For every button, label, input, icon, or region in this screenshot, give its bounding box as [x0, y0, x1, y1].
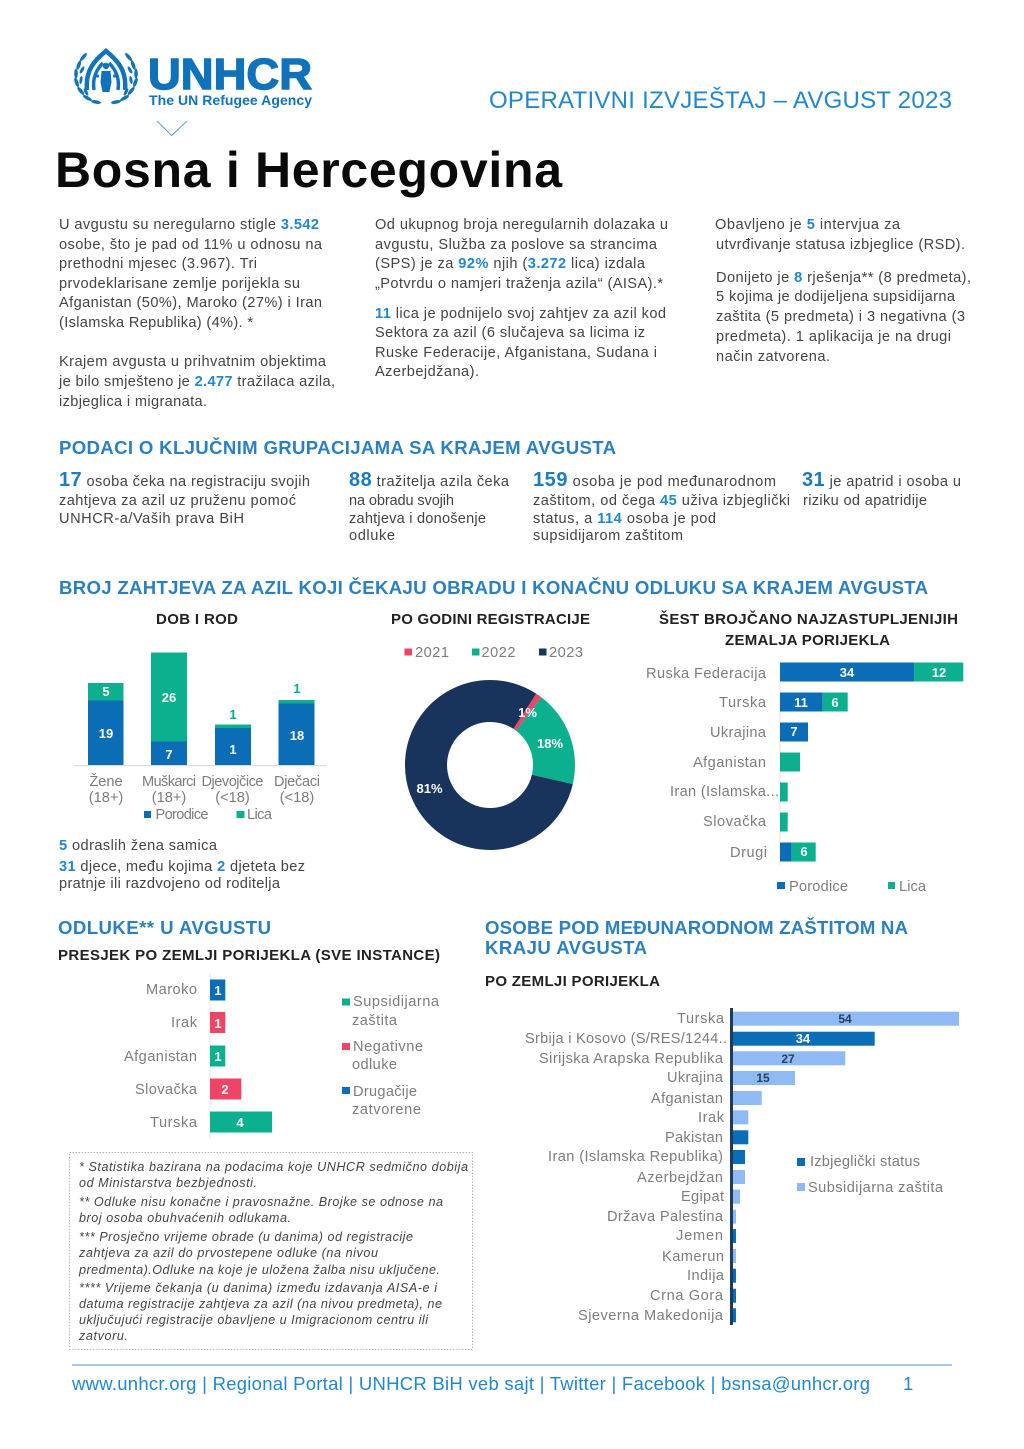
- text block: SPS and asylum applications: „Potvrdu o namjeri traženja azila“ (AISA).*: [375, 276, 663, 292]
- horizontal bar chart: Kamerun: [662, 1249, 724, 1265]
- key figure: 159 under international protection: status, a 114 osoba je pod: [533, 511, 716, 527]
- chart legend: Porodice: [789, 879, 848, 895]
- heading: pending applications: BROJ ZAHTJEVA ZA AZIL KOJI ČEKAJU OBRADU I KONAČNU ODLUKU SA KRAJEM AVGUSTA: [59, 577, 928, 598]
- footnote text: *** Prosječno vrijeme obrade (u danima) od registracije: [79, 1230, 413, 1244]
- stacked bar chart: (<18): [280, 790, 314, 806]
- horizontal bar chart: Indija: [687, 1268, 725, 1284]
- key figure: 159 under international protection: zaštitom, od čega 45 uživa izbjeglički: [533, 493, 790, 509]
- text block: RSD interviews and decisions: zaštita (5 predmeta) i 3 negativna (3: [716, 309, 965, 325]
- footnote text: ** Odluke nisu konačne i pravosnažne. Brojke se odnose na: [79, 1195, 443, 1209]
- key figure: 88 applicants: [349, 469, 510, 544]
- key figure: 17 persons: zahtjeva za azil uz pruženu pomoć: [59, 493, 296, 509]
- text block: RSD interviews and decisions: [715, 217, 971, 365]
- text block: SPS and asylum applications: avgustu, Služba za poslove sa strancima: [375, 237, 658, 253]
- stacked bar chart: [74, 652, 327, 806]
- panel: top countries of origin chart: [646, 610, 963, 895]
- horizontal bar chart: Afganistan: [651, 1091, 723, 1107]
- chart legend: 2021: [415, 645, 449, 661]
- key figure: 17 persons: 17 osoba čeka na registraciju svojih: [59, 469, 310, 491]
- chart legend: Negativne: [353, 1039, 423, 1055]
- horizontal bar chart: Crna Gora: [650, 1288, 724, 1304]
- sub heading: PRESJEK PO ZEMLJI PORIJEKLA (SVE INSTANCE): [58, 947, 440, 964]
- logo wordmark: UNHCR: [148, 50, 312, 99]
- horizontal bar chart: 15: [756, 1071, 770, 1085]
- stacked bar chart: Muškarci: [142, 774, 196, 790]
- horizontal bar chart: 27: [781, 1052, 795, 1066]
- key figure: 17 persons: UNHCR-a/Vaših prava BiH: [59, 511, 244, 527]
- footnote text: uključujući registracije obavljene u Imigracionom centru ili: [79, 1313, 429, 1327]
- title: Bosna i Hercegovina: [55, 142, 563, 198]
- horizontal bar chart: [525, 1008, 959, 1325]
- text block: RSD interviews and decisions: utvrđivanje statusa izbjeglice (RSD).: [716, 237, 965, 253]
- horizontal stacked bar chart: Drugi: [730, 845, 767, 861]
- horizontal stacked bar chart: 6: [800, 844, 808, 859]
- text block: SPS and asylum applications: [375, 217, 668, 380]
- report label: OPERATIVNI IZVJEŠTAJ – AVGUST 2023: [489, 86, 952, 114]
- horizontal stacked bar chart: Afganistan: [693, 755, 766, 771]
- text block: arrivals summary: prethodni mjesec (3.967). Tri: [59, 256, 257, 272]
- panel: registration year chart: [391, 611, 590, 850]
- horizontal stacked bar chart: 7: [790, 724, 798, 739]
- horizontal stacked bar chart: Ruska Federacija: [646, 666, 767, 682]
- panel: persons under international protection: [485, 917, 959, 1325]
- text block: arrivals summary: prvodeklarisane zemlje porijekla su: [59, 276, 300, 292]
- horizontal bar chart: 1: [214, 983, 222, 998]
- footnote text: * Statistika bazirana na podacima koje UNHCR sedmično dobija: [79, 1160, 468, 1174]
- chart heading: PO GODINI REGISTRACIJE: [391, 611, 590, 628]
- stacked bar chart: (18+): [152, 790, 186, 806]
- stacked bar chart: (<18): [215, 790, 250, 806]
- horizontal bar chart: 34: [796, 1031, 811, 1046]
- horizontal bar chart: Iran (Islamska Republika): [548, 1149, 723, 1165]
- stacked bar chart: 19: [99, 726, 113, 741]
- chart legend: Drugačije: [353, 1084, 417, 1100]
- text block: arrivals summary: U avgustu su neregularno stigle 3.542: [59, 217, 319, 233]
- key figure: 159 under international protection: supsidijarom zaštitom: [533, 528, 683, 544]
- text block: arrivals summary: Krajem avgusta u prihvatnim objektima: [59, 354, 327, 370]
- horizontal stacked bar chart: 34: [840, 665, 855, 680]
- footnote text: datuma registracije zahtjeva za azil (na nivou predmeta), ne: [79, 1297, 442, 1311]
- horizontal stacked bar chart: 11: [794, 695, 808, 710]
- section heading: [485, 917, 908, 958]
- horizontal bar chart: Država Palestina: [607, 1209, 724, 1225]
- text block: arrivals summary: [58, 217, 335, 410]
- donut chart: 81%: [416, 781, 443, 796]
- chart legend: Porodice: [156, 807, 208, 823]
- horizontal bar chart: 2: [221, 1082, 229, 1097]
- note: women and children: 31 djece, među kojima 2 djeteta bez: [59, 859, 305, 875]
- chart legend: 2022: [482, 645, 516, 661]
- footnote text: od Ministarstva bezbjednosti.: [79, 1176, 257, 1190]
- text block: RSD interviews and decisions: Obavljeno je 5 intervjua za: [715, 217, 901, 233]
- chart heading: DOB I ROD: [156, 611, 238, 628]
- note: women and children: 5 odraslih žena samica: [59, 838, 218, 854]
- text block: arrivals summary: Afganistan (50%), Maroko (27%) i Iran: [59, 295, 322, 311]
- text block: SPS and asylum applications: Od ukupnog broja neregularnih dolazaka u: [375, 217, 668, 233]
- section heading: KRAJU AVGUSTA: [485, 937, 647, 958]
- horizontal stacked bar chart: Iran (Islamska...: [670, 784, 779, 800]
- chart legend: odluke: [352, 1057, 397, 1073]
- footer: [71, 1364, 952, 1394]
- horizontal bar chart: Irak: [698, 1110, 725, 1126]
- horizontal bar chart: Turska: [150, 1115, 198, 1131]
- footnote text: [78, 1160, 468, 1343]
- icon: chevron: [157, 121, 187, 136]
- key figure: 159 under international protection: [533, 469, 790, 544]
- text block: RSD interviews and decisions: način zatvorena.: [716, 349, 830, 365]
- chart legend: 2023: [549, 645, 583, 661]
- text block: RSD interviews and decisions: 5 kojima je dodijeljena supsidijarna: [716, 289, 956, 305]
- logo tagline: The UN Refugee Agency: [149, 92, 312, 108]
- panel: footnotes: [70, 1152, 472, 1350]
- chart heading: ZEMALJA PORIJEKLA: [725, 632, 890, 649]
- stacked bar chart: 1: [229, 742, 237, 757]
- stacked bar chart: 1: [229, 707, 237, 722]
- stacked bar chart: Žene: [89, 773, 123, 790]
- stacked bar chart: 5: [102, 684, 110, 699]
- note: women and children: [59, 838, 305, 892]
- chart legend: [404, 645, 583, 661]
- text block: arrivals summary: (Islamska Republika) (4%). *: [59, 315, 253, 331]
- chart legend: Lica: [247, 807, 273, 823]
- key figure: 17 persons: [59, 469, 310, 527]
- text block: SPS and asylum applications: Ruske Federacije, Afganistana, Sudana i: [375, 345, 657, 361]
- horizontal bar chart: Jemen: [676, 1228, 723, 1244]
- horizontal bar chart: [124, 973, 272, 1138]
- key figure: 88 applicants: odluke: [349, 528, 395, 544]
- key figure: 88 applicants: zahtjeva i donošenje: [349, 511, 486, 527]
- horizontal bar chart: Slovačka: [135, 1082, 198, 1098]
- horizontal bar chart: Sjeverna Makedonija: [578, 1308, 724, 1324]
- footnote text: broj osoba obuhvaćenih odlukama.: [79, 1211, 291, 1225]
- horizontal bar chart: 1: [214, 1049, 222, 1064]
- horizontal bar chart: Turska: [677, 1011, 725, 1027]
- chart legend: zaštita: [352, 1013, 398, 1029]
- chart legend: [144, 807, 273, 823]
- footer links: www.unhcr.org | Regional Portal | UNHCR BiH veb sajt | Twitter | Facebook | bsnsa@unhcr.org: [71, 1373, 870, 1394]
- chart legend: Subsidijarna zaštita: [808, 1180, 944, 1196]
- stacked bar chart: 26: [162, 690, 176, 705]
- horizontal bar chart: 4: [236, 1115, 244, 1130]
- note: women and children: pratnje ili razdvojeno od roditelja: [59, 876, 281, 892]
- key figure: 31 stateless: 31 je apatrid i osoba u: [802, 469, 961, 491]
- horizontal bar chart: Pakistan: [665, 1130, 723, 1146]
- text block: arrivals summary: je bilo smješteno je 2.477 tražilaca azila,: [58, 374, 335, 390]
- key figure: 31 stateless: [802, 469, 961, 509]
- horizontal stacked bar chart: 6: [831, 695, 839, 710]
- chart legend: [777, 879, 927, 895]
- horizontal stacked bar chart: Ukrajina: [710, 725, 767, 741]
- icon: UNHCR emblem with laurel wreath: [73, 51, 139, 105]
- text block: SPS and asylum applications: Azerbejdžana).: [375, 364, 479, 380]
- horizontal bar chart: Srbija i Kosovo (S/RES/1244..: [525, 1031, 727, 1047]
- horizontal bar chart: Maroko: [146, 982, 197, 998]
- horizontal bar chart: Egipat: [681, 1189, 724, 1205]
- horizontal stacked bar chart: Slovačka: [703, 814, 767, 830]
- horizontal stacked bar chart: Turska: [719, 695, 767, 711]
- stacked bar chart: 1: [293, 681, 301, 696]
- key figure: 159 under international protection: 159 osoba je pod međunarodnom: [533, 469, 776, 491]
- horizontal bar chart: 1: [214, 1016, 222, 1031]
- stacked bar chart: 7: [165, 747, 173, 762]
- chart legend: Lica: [899, 879, 927, 895]
- text block: SPS and asylum applications: 11 lica je podnijelo svoj zahtjev za azil kod: [375, 306, 666, 322]
- stacked bar chart: Dječaci: [274, 774, 320, 790]
- panel: age and gender chart: [59, 611, 327, 892]
- text block: arrivals summary: izbjeglica i migranata.: [59, 394, 207, 410]
- chart legend: Supsidijarna: [353, 994, 440, 1010]
- key figure: 31 stateless: riziku od apatridije: [803, 493, 927, 509]
- chart legend: [797, 1154, 944, 1196]
- text block: SPS and asylum applications: Sektora za azil (6 slučajeva sa licima iz: [375, 325, 645, 341]
- horizontal stacked bar chart: 12: [932, 665, 946, 680]
- heading: key groups: PODACI O KLJUČNIM GRUPACIJAMA SA KRAJEM AVGUSTA: [59, 437, 616, 458]
- footnote text: predmenta).Odluke na koje je uložena žalba nisu uključene.: [78, 1263, 440, 1277]
- donut chart: 18%: [537, 736, 563, 751]
- chart heading: ŠEST BROJČANO NAJZASTUPLJENIJIH: [659, 610, 958, 628]
- horizontal bar chart: 54: [838, 1012, 852, 1026]
- key figure: 88 applicants: 88 tražitelja azila čeka: [349, 469, 510, 491]
- UNHCR logo: [73, 50, 312, 108]
- stacked bar chart: (18+): [89, 790, 123, 806]
- sub heading: PO ZEMLJI PORIJEKLA: [485, 973, 660, 990]
- footnote text: zatvoru.: [78, 1329, 128, 1343]
- text block: SPS and asylum applications: (SPS) je za 92% njih (3.272 lica) izdala: [375, 256, 646, 272]
- donut chart: [405, 680, 575, 850]
- text block: RSD interviews and decisions: predmeta). 1 aplikacija je na drugi: [716, 329, 951, 345]
- horizontal bar chart: Sirijska Arapska Republika: [539, 1051, 724, 1067]
- footnote text: zahtjeva za azil do prvostepene odluke (na nivou: [78, 1246, 378, 1260]
- horizontal bar chart: Ukrajina: [667, 1070, 724, 1086]
- chart legend: [342, 994, 440, 1118]
- stacked bar chart: Djevojčice: [202, 774, 264, 790]
- text block: arrivals summary: osobe, što je pad od 11% u odnosu na: [59, 237, 323, 253]
- footnote text: **** Vrijeme čekanja (u danima) između izdavanja AISA-e i: [79, 1281, 438, 1295]
- key figure: 88 applicants: na obradu svojih: [349, 493, 454, 509]
- chart legend: zatvorene: [352, 1102, 421, 1118]
- chart heading: [659, 610, 958, 649]
- chart legend: Izbjeglički status: [810, 1154, 920, 1170]
- section heading: ODLUKE** U AVGUSTU: [58, 917, 271, 938]
- horizontal bar chart: Afganistan: [124, 1049, 197, 1065]
- page number: 1: [903, 1373, 913, 1394]
- horizontal bar chart: Irak: [171, 1015, 198, 1031]
- horizontal bar chart: Azerbejdžan: [637, 1170, 723, 1186]
- text block: RSD interviews and decisions: Donijeto je 8 rješenja** (8 predmeta),: [716, 270, 971, 286]
- donut chart: 1%: [518, 705, 537, 720]
- section heading: OSOBE POD MEĐUNARODNOM ZAŠTITOM NA: [485, 917, 908, 938]
- horizontal stacked bar chart: [646, 662, 963, 865]
- stacked bar chart: 18: [290, 728, 304, 743]
- panel: decisions in August: [58, 917, 440, 1138]
